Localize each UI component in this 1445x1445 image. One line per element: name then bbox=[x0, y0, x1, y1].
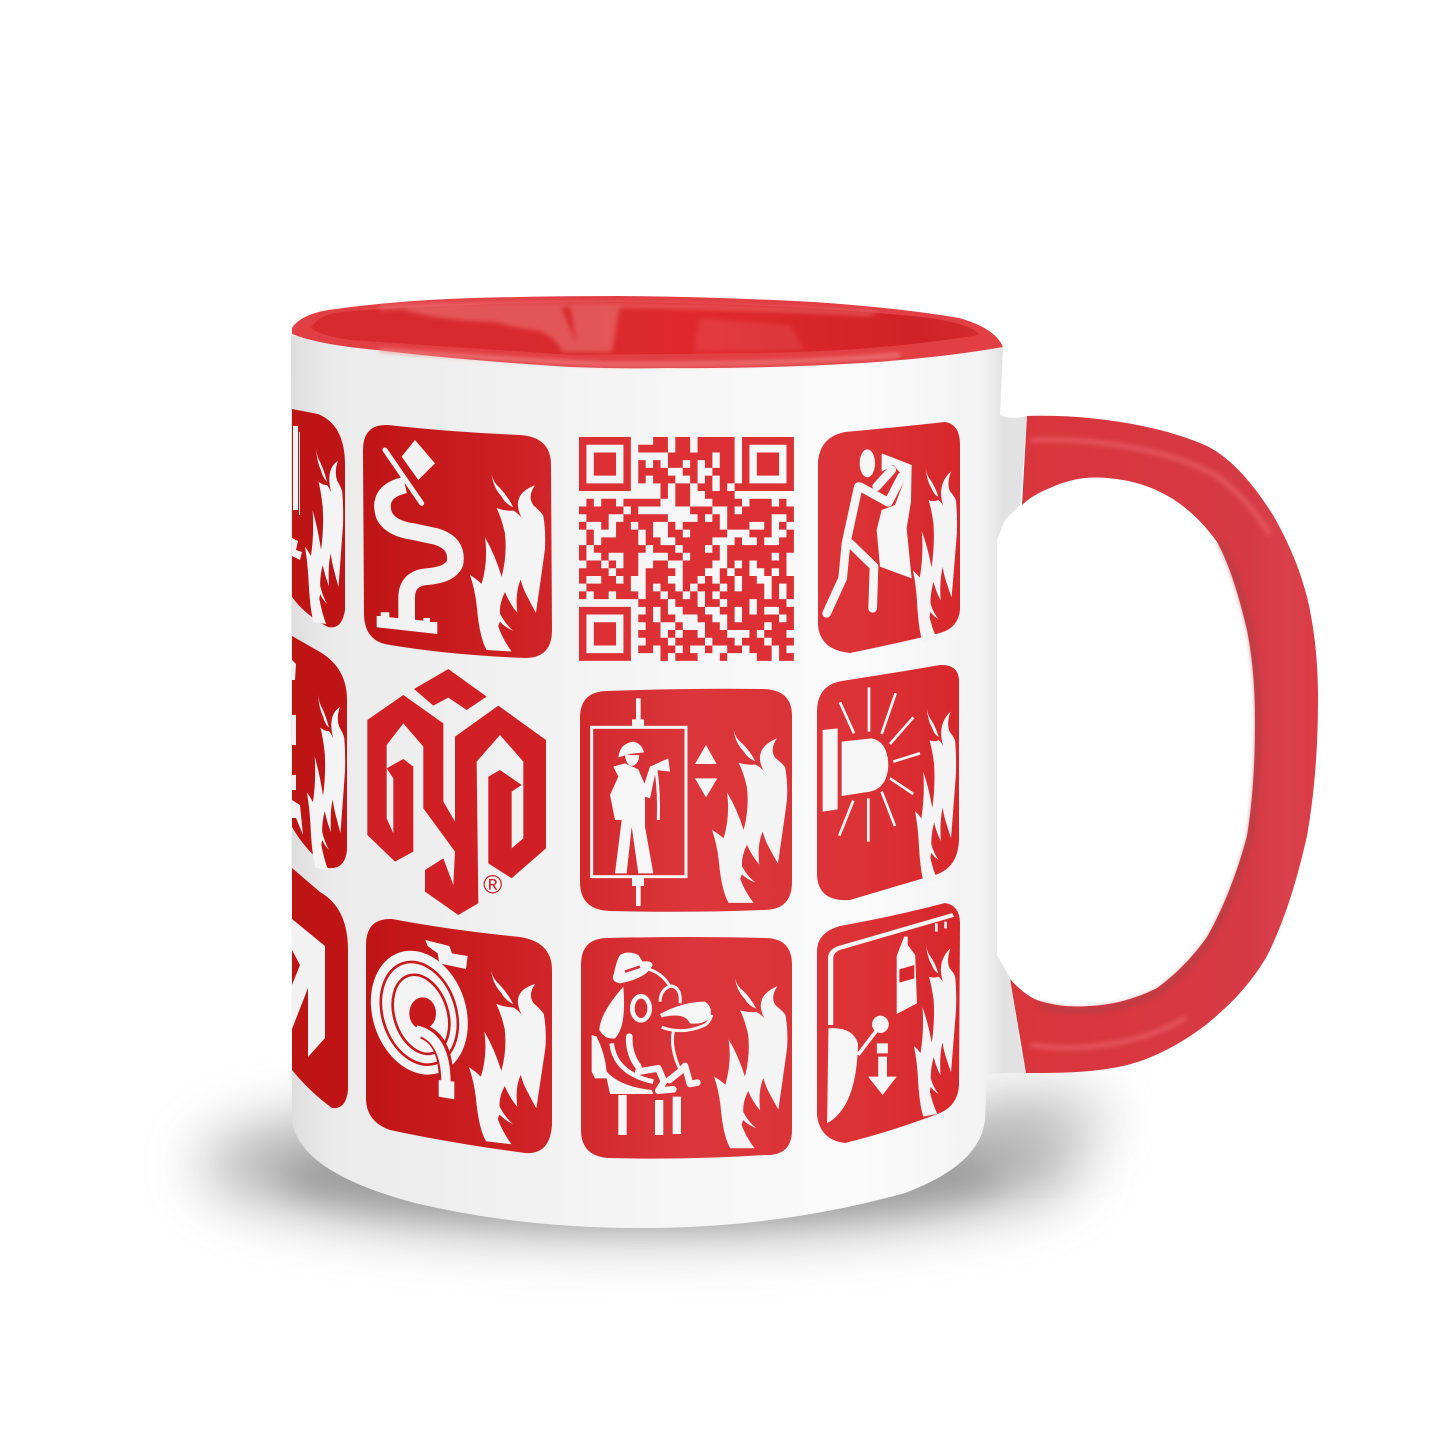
icon: alarm beacon bbox=[823, 687, 920, 842]
icon: flame bbox=[305, 446, 343, 628]
icon fragment bbox=[292, 426, 302, 560]
red lip bbox=[292, 296, 1003, 368]
handle sheen bbox=[1030, 440, 1270, 1048]
handle bbox=[1010, 416, 1318, 1073]
icon: flame bbox=[914, 939, 956, 1118]
rim and interior bbox=[292, 296, 1003, 368]
icon: firefighter in lift bbox=[592, 698, 717, 906]
interior bbox=[311, 302, 979, 355]
icon: flame bbox=[307, 692, 345, 874]
panel: tile hose reel bbox=[355, 919, 552, 1153]
icon: standpipe with hammer bbox=[377, 440, 455, 634]
icon: flame bbox=[469, 968, 546, 1148]
lip sheen bbox=[380, 350, 900, 364]
panel: tile person with fire blanket bbox=[818, 422, 960, 653]
panel: tile extinguishing system bbox=[817, 903, 960, 1143]
logo monogram bbox=[367, 695, 546, 915]
panel: tile column A row 3 with arrow bbox=[292, 868, 348, 1108]
icon: hose reel bbox=[355, 938, 483, 1099]
icon: dog wearing hat on chair bbox=[592, 952, 712, 1135]
logo chevron bbox=[414, 669, 487, 710]
panel: tile column A row 2 (cropped) bbox=[292, 636, 347, 874]
icon: arrow bbox=[292, 919, 325, 1057]
icon fragment bbox=[292, 660, 303, 835]
registered mark: ® bbox=[483, 869, 502, 899]
icon: flame bbox=[915, 702, 956, 885]
panel: QR code bbox=[579, 437, 794, 661]
icon: flame bbox=[712, 730, 787, 903]
panel: tile column A row 1 (cropped) bbox=[292, 409, 345, 628]
panel: tile firefighter lift bbox=[580, 689, 792, 912]
mug body bbox=[291, 336, 1027, 1228]
icon: person holding blanket bbox=[827, 449, 912, 613]
panel: tile alarm beacon bbox=[817, 665, 959, 900]
panel: tile dog in chair bbox=[581, 937, 792, 1159]
icon: flame bbox=[913, 462, 957, 644]
panel: brand logo bbox=[367, 669, 546, 915]
icon: flame bbox=[714, 978, 787, 1148]
icon: flame bbox=[470, 473, 545, 654]
ground shadow bbox=[200, 1090, 1110, 1235]
interior reflections bbox=[380, 302, 880, 352]
panel: tile standpipe bbox=[363, 425, 552, 658]
handle inner shading bbox=[1040, 542, 1258, 1010]
icon: pipe, cylinder and release lever bbox=[827, 915, 953, 1123]
